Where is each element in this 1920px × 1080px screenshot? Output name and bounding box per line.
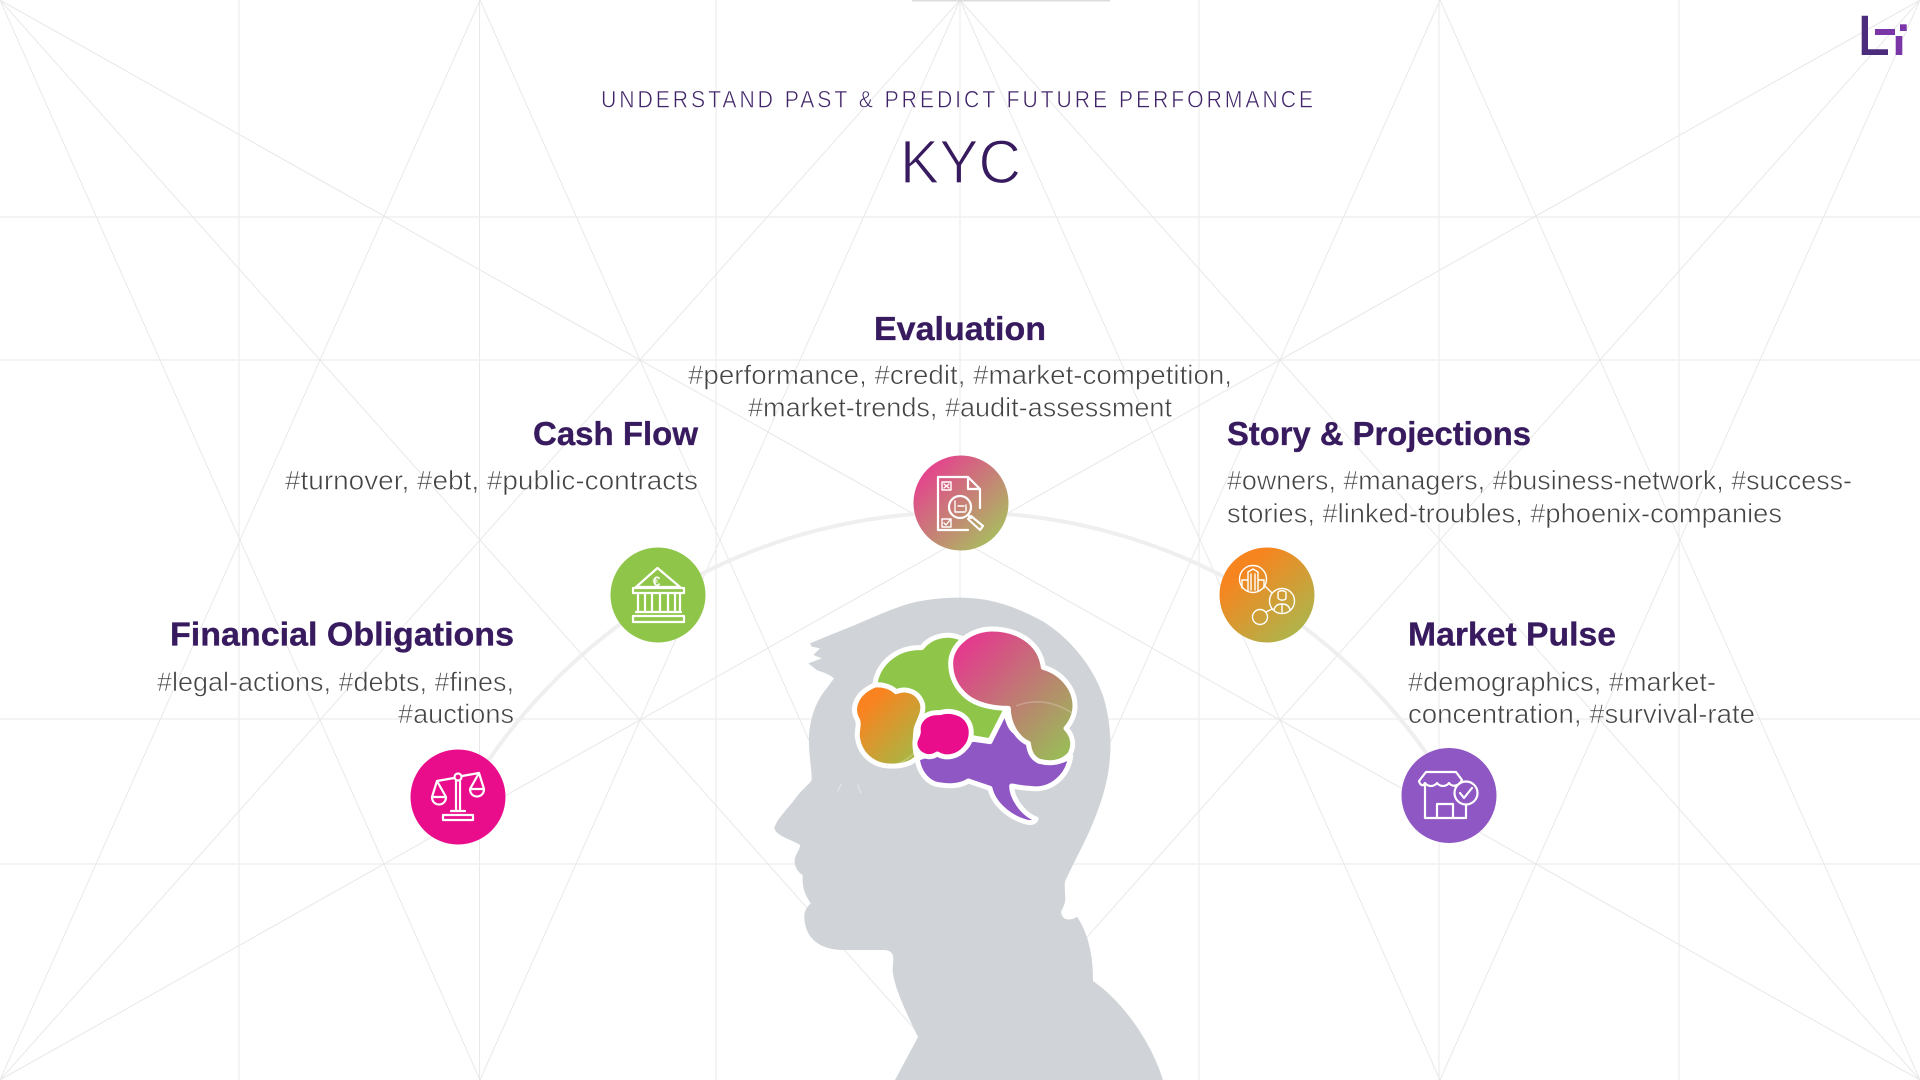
tags: evaluation: #market-trends, #audit-assessment — [748, 392, 1172, 422]
tags: market pulse: concentration, #survival-rate — [1408, 699, 1755, 729]
tags: story and projections — [1227, 466, 1852, 528]
subtitle: UNDERSTAND PAST & PREDICT FUTURE PERFORMANCE — [601, 86, 1316, 114]
panel: evaluation — [688, 311, 1232, 550]
tags: evaluation: #performance, #credit, #market-competition, — [688, 360, 1232, 390]
tags: market pulse: #demographics, #market- — [1408, 667, 1716, 697]
icon: network of company and person — [1220, 548, 1314, 642]
tags: financial obligations: #legal-actions, #debts, #fines, — [157, 667, 514, 697]
heading: market pulse: Market Pulse — [1408, 616, 1616, 654]
logo — [1862, 16, 1907, 55]
arc connecting the five topic circles — [458, 512, 1462, 810]
brain lobe: orange gradient — [855, 685, 923, 766]
tags: market pulse — [1408, 667, 1755, 729]
icon: bank with euro sign: € — [653, 573, 661, 589]
brain lobe: pink to green gradient — [951, 629, 1075, 763]
illustration: head silhouette with brain — [774, 598, 1163, 1080]
brain lobe: magenta — [915, 711, 971, 757]
brain lobe: green — [875, 635, 1007, 741]
icon: bank with euro sign — [610, 548, 706, 642]
brain — [855, 629, 1075, 823]
heading: financial obligations: Financial Obligations — [170, 616, 514, 654]
icon: scales of justice — [410, 750, 506, 844]
heading: evaluation: Evaluation — [874, 311, 1046, 348]
panel: cash flow — [285, 416, 706, 642]
panel: financial obligations — [157, 616, 514, 844]
panel: story and projections — [1220, 416, 1852, 642]
brain lobe: purple — [917, 712, 1071, 823]
head silhouette — [774, 598, 1163, 1080]
tags: evaluation — [688, 360, 1232, 422]
tags: story and projections: #owners, #managers, #business-network, #success- — [1227, 466, 1852, 496]
icon: evaluation document with magnifier — [914, 456, 1008, 550]
panel: market pulse — [1402, 616, 1755, 843]
heading: story and projections: Story & Projections — [1227, 416, 1531, 453]
title: KYC — [900, 128, 1021, 196]
tags: story and projections: stories, #linked-troubles, #phoenix-companies — [1227, 498, 1782, 528]
icon: shop with check mark — [1402, 748, 1496, 843]
tags: cash flow: #turnover, #ebt, #public-contracts — [285, 466, 698, 496]
heading: cash flow: Cash Flow — [533, 416, 699, 453]
tags: financial obligations: #auctions — [398, 699, 514, 729]
tags: financial obligations — [157, 667, 514, 729]
